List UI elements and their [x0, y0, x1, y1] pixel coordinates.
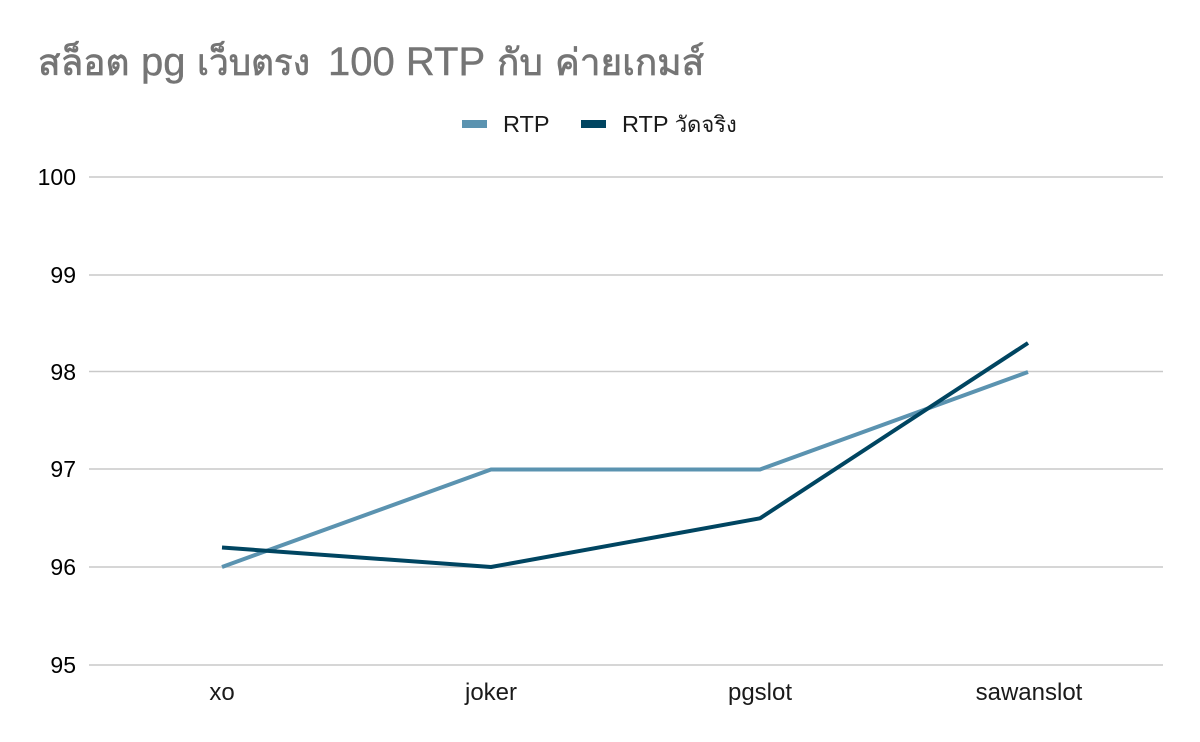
x axis labels: sawanslot: [976, 679, 1083, 706]
x axis labels: xo: [209, 679, 235, 706]
title: [38, 39, 704, 84]
y axis labels: 100: [38, 164, 76, 190]
title: 100 RTP: [328, 40, 485, 84]
x axis labels: [209, 679, 1083, 706]
y axis labels: 98: [50, 359, 76, 385]
series: RTP: [222, 372, 1028, 567]
title: เว็บตรง: [197, 39, 310, 83]
x axis labels: pgslot: [728, 679, 792, 706]
title: สล็อต: [38, 39, 130, 83]
title: pg: [141, 40, 186, 84]
title: ค่ายเกมส์: [555, 42, 704, 83]
y axis labels: 97: [50, 456, 76, 482]
y axis labels: [38, 164, 76, 678]
legend item: RTP: [462, 111, 550, 137]
legend item: RTP measured: RTP วัดจริง: [622, 111, 737, 137]
legend: [462, 111, 737, 137]
y axis labels: 99: [50, 262, 76, 288]
y axis labels: 96: [50, 554, 76, 580]
series: RTP measured: [222, 343, 1028, 567]
legend item: RTP: RTP: [503, 111, 550, 137]
x axis labels: joker: [464, 679, 517, 706]
y axis labels: 95: [50, 652, 76, 678]
title: กับ: [497, 42, 543, 83]
